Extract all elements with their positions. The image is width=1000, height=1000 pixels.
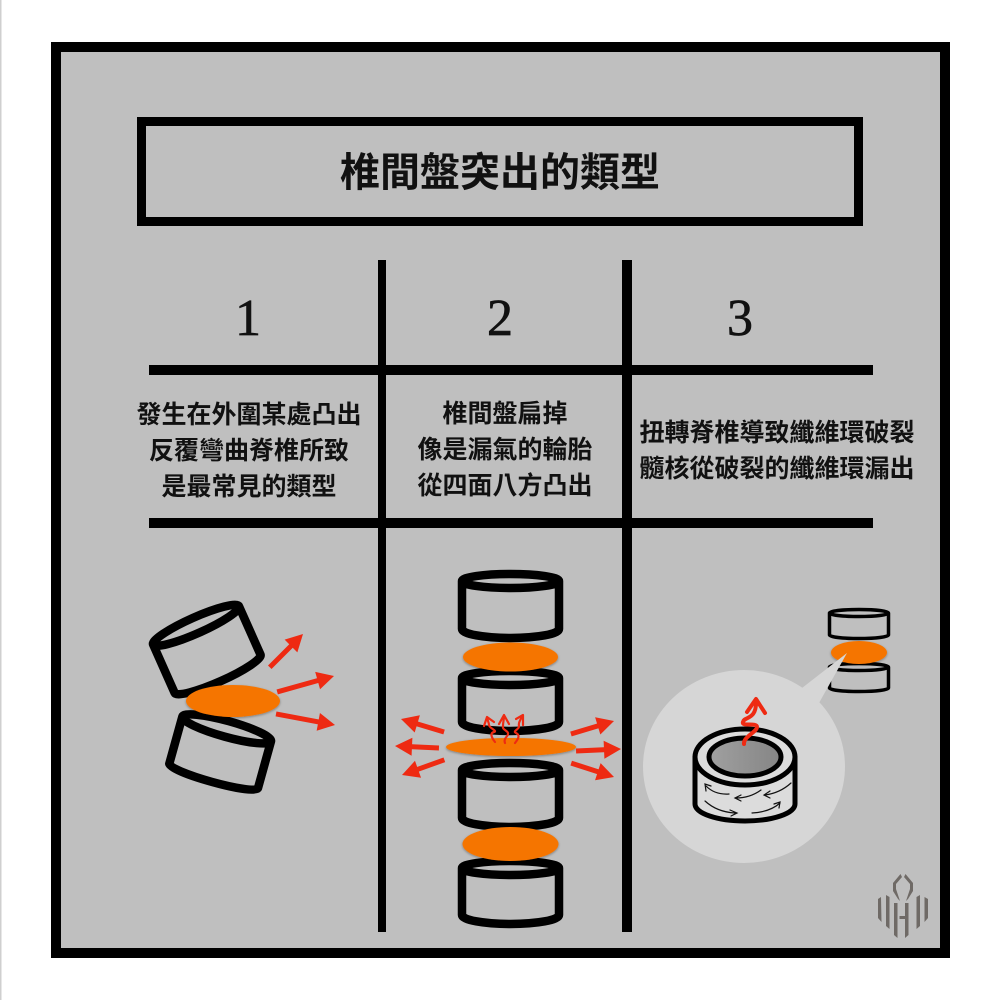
callout magnifier circle (643, 653, 847, 863)
title box: 椎間盤突出的類型 (340, 151, 660, 195)
red wavy arrow (743, 699, 765, 744)
text: type 2 description: 從四面八方凸出 (417, 471, 593, 500)
title box (142, 122, 858, 222)
text: type 3 description: 髓核從破裂的纖維環漏出 (639, 455, 915, 483)
text: type 1 description: 是最常見的類型 (161, 473, 337, 501)
text: type 1 description: 發生在外圍某處凸出 (136, 401, 362, 429)
column numbers: 2 (487, 290, 513, 347)
text: type 3 description (639, 419, 915, 483)
text: type 2 description: 椎間盤扁掉 (442, 400, 568, 428)
red arrows right (568, 712, 621, 786)
text: type 3 description: 扭轉脊椎導致纖維環破裂 (639, 419, 915, 447)
text: type 1 description (136, 401, 362, 501)
text: type 1 description: 反覆彎曲脊椎所致 (149, 437, 349, 465)
table grid lines (149, 260, 873, 932)
rotation arrows (705, 783, 791, 816)
illustration: annulus ring with rotation (695, 699, 795, 821)
illustration: type 1 tilted vertebrae (150, 599, 337, 794)
text: type 2 description (417, 400, 593, 500)
column numbers: 1 (235, 290, 261, 347)
column numbers (235, 290, 753, 347)
red arrows left (395, 710, 447, 783)
column numbers: 3 (727, 290, 753, 347)
illustration: type 2 vertebrae stack (395, 574, 621, 924)
logo (878, 874, 928, 938)
text: type 2 description: 像是漏氣的輪胎 (417, 436, 593, 464)
small wavy arrows (484, 715, 523, 743)
illustration: type 3 small vertebrae (830, 610, 888, 692)
